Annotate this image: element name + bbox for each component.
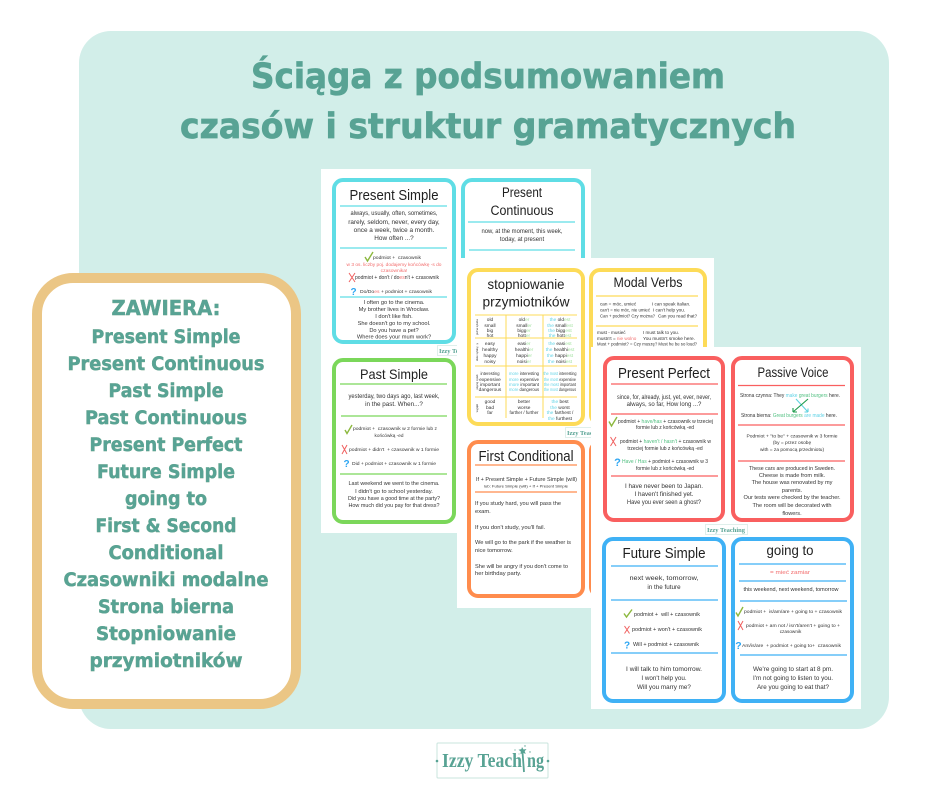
- card: going to: this weekend, next weekend, tomorrow: [744, 587, 839, 593]
- card: stopniowanie: stopniowanie: [488, 276, 565, 292]
- card: Passive Voice: Cheese is made from milk.: [759, 473, 826, 479]
- card: Modal Verbs: [591, 270, 705, 424]
- logo: Izzy Teaching: [436, 743, 549, 778]
- comparison table: the most important: [544, 382, 577, 388]
- contents text: przymiotników: [90, 651, 242, 672]
- card: Present Simple: rarely, seldom, never, every day,: [348, 219, 440, 226]
- comparison table: the furthest: [548, 416, 573, 422]
- card: First Conditional: her birthday party.: [475, 571, 522, 577]
- contents text: Conditional: [108, 543, 224, 564]
- icon: cross: [342, 445, 347, 454]
- card: First Conditional: [469, 442, 583, 596]
- card: Past Simple: I didn't go to school yesterday.: [355, 489, 433, 495]
- card: Present Simple: How often ...?: [374, 235, 414, 242]
- comparison table: more expensive: [509, 377, 539, 383]
- title: Ściąga z podsumowaniem: [251, 55, 725, 97]
- card: Present Perfect: Present Perfect: [618, 365, 711, 382]
- comparison table: worse: [518, 405, 531, 411]
- card: Future Simple: Will + podmiot + czasownik: [633, 642, 700, 648]
- card: Present Simple: I often go to the cinema.: [363, 300, 425, 306]
- card: stopniowanie: [469, 270, 583, 424]
- icon: check: [365, 252, 373, 261]
- card: First Conditional: lub: Future Simple (will) + If + Present Simple: [484, 484, 568, 488]
- card: Future Simple: I won't help you.: [641, 675, 687, 682]
- card: Passive Voice: parents.: [782, 488, 803, 494]
- comparison table: expensive: [479, 377, 501, 383]
- card: Modal Verbs: must - musieć: [597, 330, 626, 335]
- card: Modal Verbs: You mustn't smoke here.: [643, 336, 695, 341]
- card: Present Perfect: formie lub z końcówką -ed: [636, 466, 694, 472]
- icon: cross: [610, 437, 616, 446]
- card: Past Simple: końcówką -ed: [375, 433, 404, 438]
- contents text: Present Continuous: [68, 354, 264, 375]
- comparison table: more dangerous: [509, 387, 540, 393]
- comparison table: wyjątki: [475, 403, 479, 412]
- card: Present Continuous: Continuous: [490, 203, 554, 218]
- comparison table: dangerous: [479, 387, 502, 393]
- card: Present Simple: czasownika!: [381, 268, 407, 274]
- card: Present Simple: She doesn't go to my school.: [358, 321, 431, 327]
- icon: wand: [514, 745, 531, 772]
- card: Present Perfect: trzeciej formie lub z końcówką -ed: [627, 446, 703, 452]
- contents text: Future Simple: [97, 462, 235, 483]
- card: Present Perfect: podmiot + haven't / hasn't + czasownik w: [620, 439, 711, 445]
- comparison table: dwie sylaby, -y: [475, 342, 479, 361]
- card: First Conditional: If you don't study, you'll fail.: [475, 525, 545, 531]
- card: Present Perfect: podmiot + have/has + czasownik w trzeciej: [618, 419, 713, 425]
- comparison table: better: [518, 399, 531, 405]
- card: Passive Voice: These cars are produced in Sweden.: [749, 466, 835, 472]
- card: Modal Verbs: I must talk to you.: [643, 330, 679, 335]
- card: going to: We're going to start at 8 pm.: [753, 666, 833, 673]
- icon: question: ?: [735, 640, 742, 652]
- comparison table: big: [487, 328, 494, 334]
- card: Present Perfect: Have you ever seen a ghost?: [627, 499, 701, 506]
- comparison table: small: [484, 323, 496, 329]
- card: Present Continuous: today, at present: [500, 237, 544, 243]
- comparison table: the most expensive: [544, 377, 576, 383]
- comparison table: jedna sylaba: [475, 319, 479, 336]
- card: Passive Voice: Strona czynna: They make great burgers here.: [740, 393, 840, 399]
- comparison table: the hottest: [549, 333, 572, 339]
- contents text: [64, 296, 268, 672]
- icon: check: [609, 417, 617, 426]
- icon: check: [736, 607, 743, 616]
- contents text: Stopniowanie: [96, 624, 236, 645]
- contents text: Past Continuous: [85, 408, 247, 429]
- card: Modal Verbs: Must + podmiot? = Czy muszę? Must he be so loud?: [597, 342, 697, 346]
- title: [180, 55, 796, 147]
- comparison table: happier: [516, 353, 532, 359]
- comparison table: the best: [551, 399, 569, 405]
- comparison table: interesting: [480, 371, 500, 377]
- card: Modal Verbs: I can't help you.: [653, 308, 685, 312]
- card: Present Simple: My brother lives in Wrocław.: [359, 307, 430, 313]
- card: Future Simple: podmiot + will + czasownik: [634, 612, 701, 618]
- card: Present Simple: [334, 180, 454, 342]
- card: going to: I'm not going to listen to you.: [753, 675, 833, 682]
- card: Second Conditional: [591, 442, 705, 596]
- card: going to: czasownik: [780, 629, 802, 634]
- contents text: Past Simple: [108, 381, 224, 402]
- card: First Conditional: If + Present Simple + Future Simple (will): [476, 477, 577, 483]
- card: Passive Voice: Strona bierna: Great burgers are made here.: [741, 413, 837, 419]
- card: Present Simple: podmiot + czasownik: [373, 255, 422, 261]
- logo: Izzy Teaching: Izzy Teach: [442, 750, 522, 772]
- card: going to: podmiot + am not / isn't/aren't + going to +: [746, 623, 840, 628]
- card: Passive Voice: (by = przez osobę: [773, 440, 811, 446]
- comparison table: more interesting: [509, 371, 539, 377]
- comparison table: healthier: [515, 347, 534, 353]
- contents text: going to: [125, 489, 207, 510]
- comparison table: hot: [487, 333, 494, 339]
- card: Present Simple: once a week, twice a month.: [354, 227, 435, 234]
- card: Past Simple: podmiot + didn't + czasownik w 1 formie: [349, 447, 439, 453]
- arrows: [793, 399, 808, 412]
- card: Future Simple: Future Simple: [622, 546, 706, 562]
- card: Past Simple: How much did you pay for that dress?: [348, 503, 440, 509]
- card: Modal Verbs: Modal Verbs: [614, 275, 683, 290]
- card: Past Simple: Did you have a good time at the party?: [348, 496, 441, 502]
- sheet 3: [591, 347, 861, 709]
- logo: sheet 3: Izzy Teaching: [707, 527, 746, 534]
- comparison table: the healthiest: [546, 347, 575, 353]
- contents text: Present Perfect: [90, 435, 243, 456]
- card: Passive Voice: with = za pomocą przedmiotu): [760, 447, 824, 453]
- contents text: Czasowniki modalne: [64, 570, 268, 591]
- comparison table: healthy: [482, 347, 498, 353]
- card: Present Simple: always, usually, often, sometimes,: [350, 210, 438, 217]
- background panel: [79, 31, 889, 729]
- sheet 1: [321, 169, 591, 533]
- comparison table: happy: [483, 353, 497, 359]
- card: Modal Verbs: can = móc, umieć: [600, 302, 637, 306]
- logo: Izzy Teaching: ng: [527, 750, 544, 772]
- comparison table: good: [485, 399, 496, 405]
- comparison table: the easiest: [548, 341, 572, 347]
- comparison table: the worst: [550, 405, 570, 411]
- card: Present Simple: Present Simple: [350, 187, 438, 204]
- comparison table: więcej sylab: [475, 374, 479, 390]
- card: Future Simple: [604, 539, 724, 701]
- comparison table: easy: [485, 342, 496, 347]
- card: Present Simple: Do/Does + podmiot + czasownik: [360, 289, 433, 295]
- comparison table: the biggest: [548, 328, 572, 334]
- card: Modal Verbs: Can + podmiot? Czy można?: [600, 314, 655, 318]
- card: Passive Voice: [733, 358, 852, 520]
- card: going to: Am/is/are + podmiot + going to+ czasownik: [742, 643, 842, 648]
- card: Passive Voice: Podmiot + "to be" + czasownik w 3 formie: [746, 434, 838, 440]
- comparison table: the happiest: [547, 353, 574, 359]
- card: going to: [733, 539, 852, 701]
- card: Passive Voice: Our tests were checked by the teacher.: [743, 495, 841, 501]
- card: going to: going to: [766, 542, 814, 558]
- icon: cross: [624, 626, 630, 634]
- title: czasów i struktur gramatycznych: [180, 107, 796, 147]
- card: Past Simple: [334, 360, 454, 522]
- card: Past Simple: Did + podmiot + czasownik w 1 formie: [352, 461, 436, 466]
- comparison table: noisier: [517, 359, 531, 365]
- comparison table: the smallest: [547, 323, 573, 329]
- card: Present Continuous: now, at the moment, this week,: [482, 229, 563, 235]
- card: Modal Verbs: Can you read that?: [658, 314, 698, 318]
- card: Future Simple: next week, tomorrow,: [630, 575, 699, 582]
- icon: question: ?: [614, 457, 621, 469]
- card: Present Simple: I don't like fish.: [375, 314, 413, 320]
- card: Present Continuous: Present: [502, 185, 542, 200]
- contents text: First & Second: [96, 516, 236, 537]
- card: Present Perfect: Have / Has + podmiot + czasownik w 3: [622, 459, 708, 465]
- comparison table: bigger: [517, 328, 531, 334]
- card: Past Simple: Last weekend we went to the cinema.: [348, 481, 440, 487]
- comparison table: farther / further: [510, 410, 539, 416]
- panel: contents list: [37, 278, 296, 704]
- card: Modal Verbs: can't = nie móc, nie umieć: [600, 308, 651, 312]
- logo: sheet 2: [566, 428, 608, 438]
- icon: question: ?: [624, 640, 630, 652]
- card: Passive Voice: The house was renovated by my: [752, 480, 833, 486]
- sheet 2: [457, 258, 714, 608]
- logo: sheet 1: Izzy Teaching: [439, 348, 478, 355]
- contents text: Present Simple: [92, 327, 240, 348]
- icon: question: ?: [350, 287, 357, 298]
- icon: question: ?: [343, 459, 350, 470]
- card: Present Simple: Where does your mum work?: [357, 334, 431, 340]
- contents text: ZAWIERA:: [112, 296, 220, 320]
- card: going to: podmiot + is/am/are + going to + czasownik: [744, 609, 843, 614]
- comparison table: older: [519, 317, 530, 323]
- card: Passive Voice: Passive Voice: [758, 365, 828, 380]
- card: First Conditional: nice tomorrow.: [475, 548, 513, 554]
- card: First Conditional: exam.: [475, 509, 491, 515]
- card: Present Perfect: since, for, already, just, yet, ever, never,: [617, 395, 711, 401]
- card: Present Perfect: always, so far, How long ...?: [627, 402, 702, 408]
- card: First Conditional: We will go to the park if the weather is: [475, 540, 571, 546]
- card: Present Continuous: [463, 180, 583, 300]
- card: Present Perfect: I haven't finished yet.: [635, 491, 694, 498]
- card: stopniowanie: przymiotników: [482, 294, 570, 310]
- logo: sheet 1: [438, 346, 480, 356]
- comparison table: more important: [509, 382, 540, 388]
- logo: sheet 2: Izzy Teaching: [567, 430, 606, 437]
- card: Present Simple: w 3 os. liczby poj. dodajemy końcówkę -s do: [346, 262, 442, 268]
- comparison table: easier: [517, 341, 531, 347]
- comparison table: smaller: [516, 323, 532, 329]
- comparison table: old: [487, 317, 494, 323]
- card: Past Simple: Past Simple: [360, 366, 428, 382]
- icon: cross: [349, 273, 355, 282]
- comparison table: hotter: [518, 333, 531, 339]
- card: Present Perfect: I have never been to Japan.: [625, 483, 703, 490]
- icon: check: [624, 610, 632, 617]
- comparison table: far: [487, 410, 493, 416]
- card: Modal Verbs: I can speak Italian.: [652, 302, 690, 306]
- card: Past Simple: podmiot + czasownik w 2 formie lub z: [353, 426, 438, 431]
- icon: cross: [738, 621, 743, 630]
- comparison table: the most interesting: [544, 371, 577, 377]
- card: Present Simple: podmiot + don't / doesn't + czasownik: [355, 275, 440, 281]
- card: Present Perfect: [605, 358, 723, 520]
- card: First Conditional: If you study hard, you will pass the: [475, 501, 561, 507]
- card: Modal Verbs: mustn't = nie wolno: [597, 336, 637, 341]
- card: Future Simple: in the future: [647, 584, 681, 591]
- card: Present Perfect: formie lub z końcówką -ed: [636, 425, 694, 431]
- card: Past Simple: yesterday, two days ago, last week,: [348, 393, 440, 400]
- card: First Conditional: She will be angry if you don't come to: [475, 564, 568, 570]
- card: First Conditional: First Conditional: [478, 448, 574, 465]
- card: going to: Are you going to eat that?: [757, 684, 830, 691]
- comparison table: noisy: [484, 359, 496, 365]
- comparison table: the noisiest: [548, 359, 573, 365]
- comparison table: [475, 315, 577, 422]
- card: Future Simple: I will talk to him tomorrow.: [626, 666, 702, 673]
- card: Past Simple: in the past. When...?: [365, 401, 423, 408]
- comparison table: important: [480, 382, 501, 388]
- comparison table: bad: [486, 405, 494, 411]
- comparison table: the most dangerous: [544, 387, 576, 393]
- card: Passive Voice: flowers.: [782, 511, 802, 517]
- comparison table: the farthest /: [547, 410, 574, 416]
- logo: sheet 3: [706, 524, 748, 534]
- comparison table: the oldest: [550, 317, 571, 323]
- card: Future Simple: podmiot + won't + czasownik: [632, 627, 703, 633]
- card: going to: = mieć zamiar: [770, 570, 810, 576]
- contents text: Strona bierna: [98, 597, 234, 618]
- card: Future Simple: Will you marry me?: [637, 684, 691, 691]
- card: Passive Voice: The room will be decorated with: [753, 503, 831, 509]
- icon: check: [345, 425, 352, 434]
- card: Present Simple: Do you have a pet?: [369, 328, 419, 334]
